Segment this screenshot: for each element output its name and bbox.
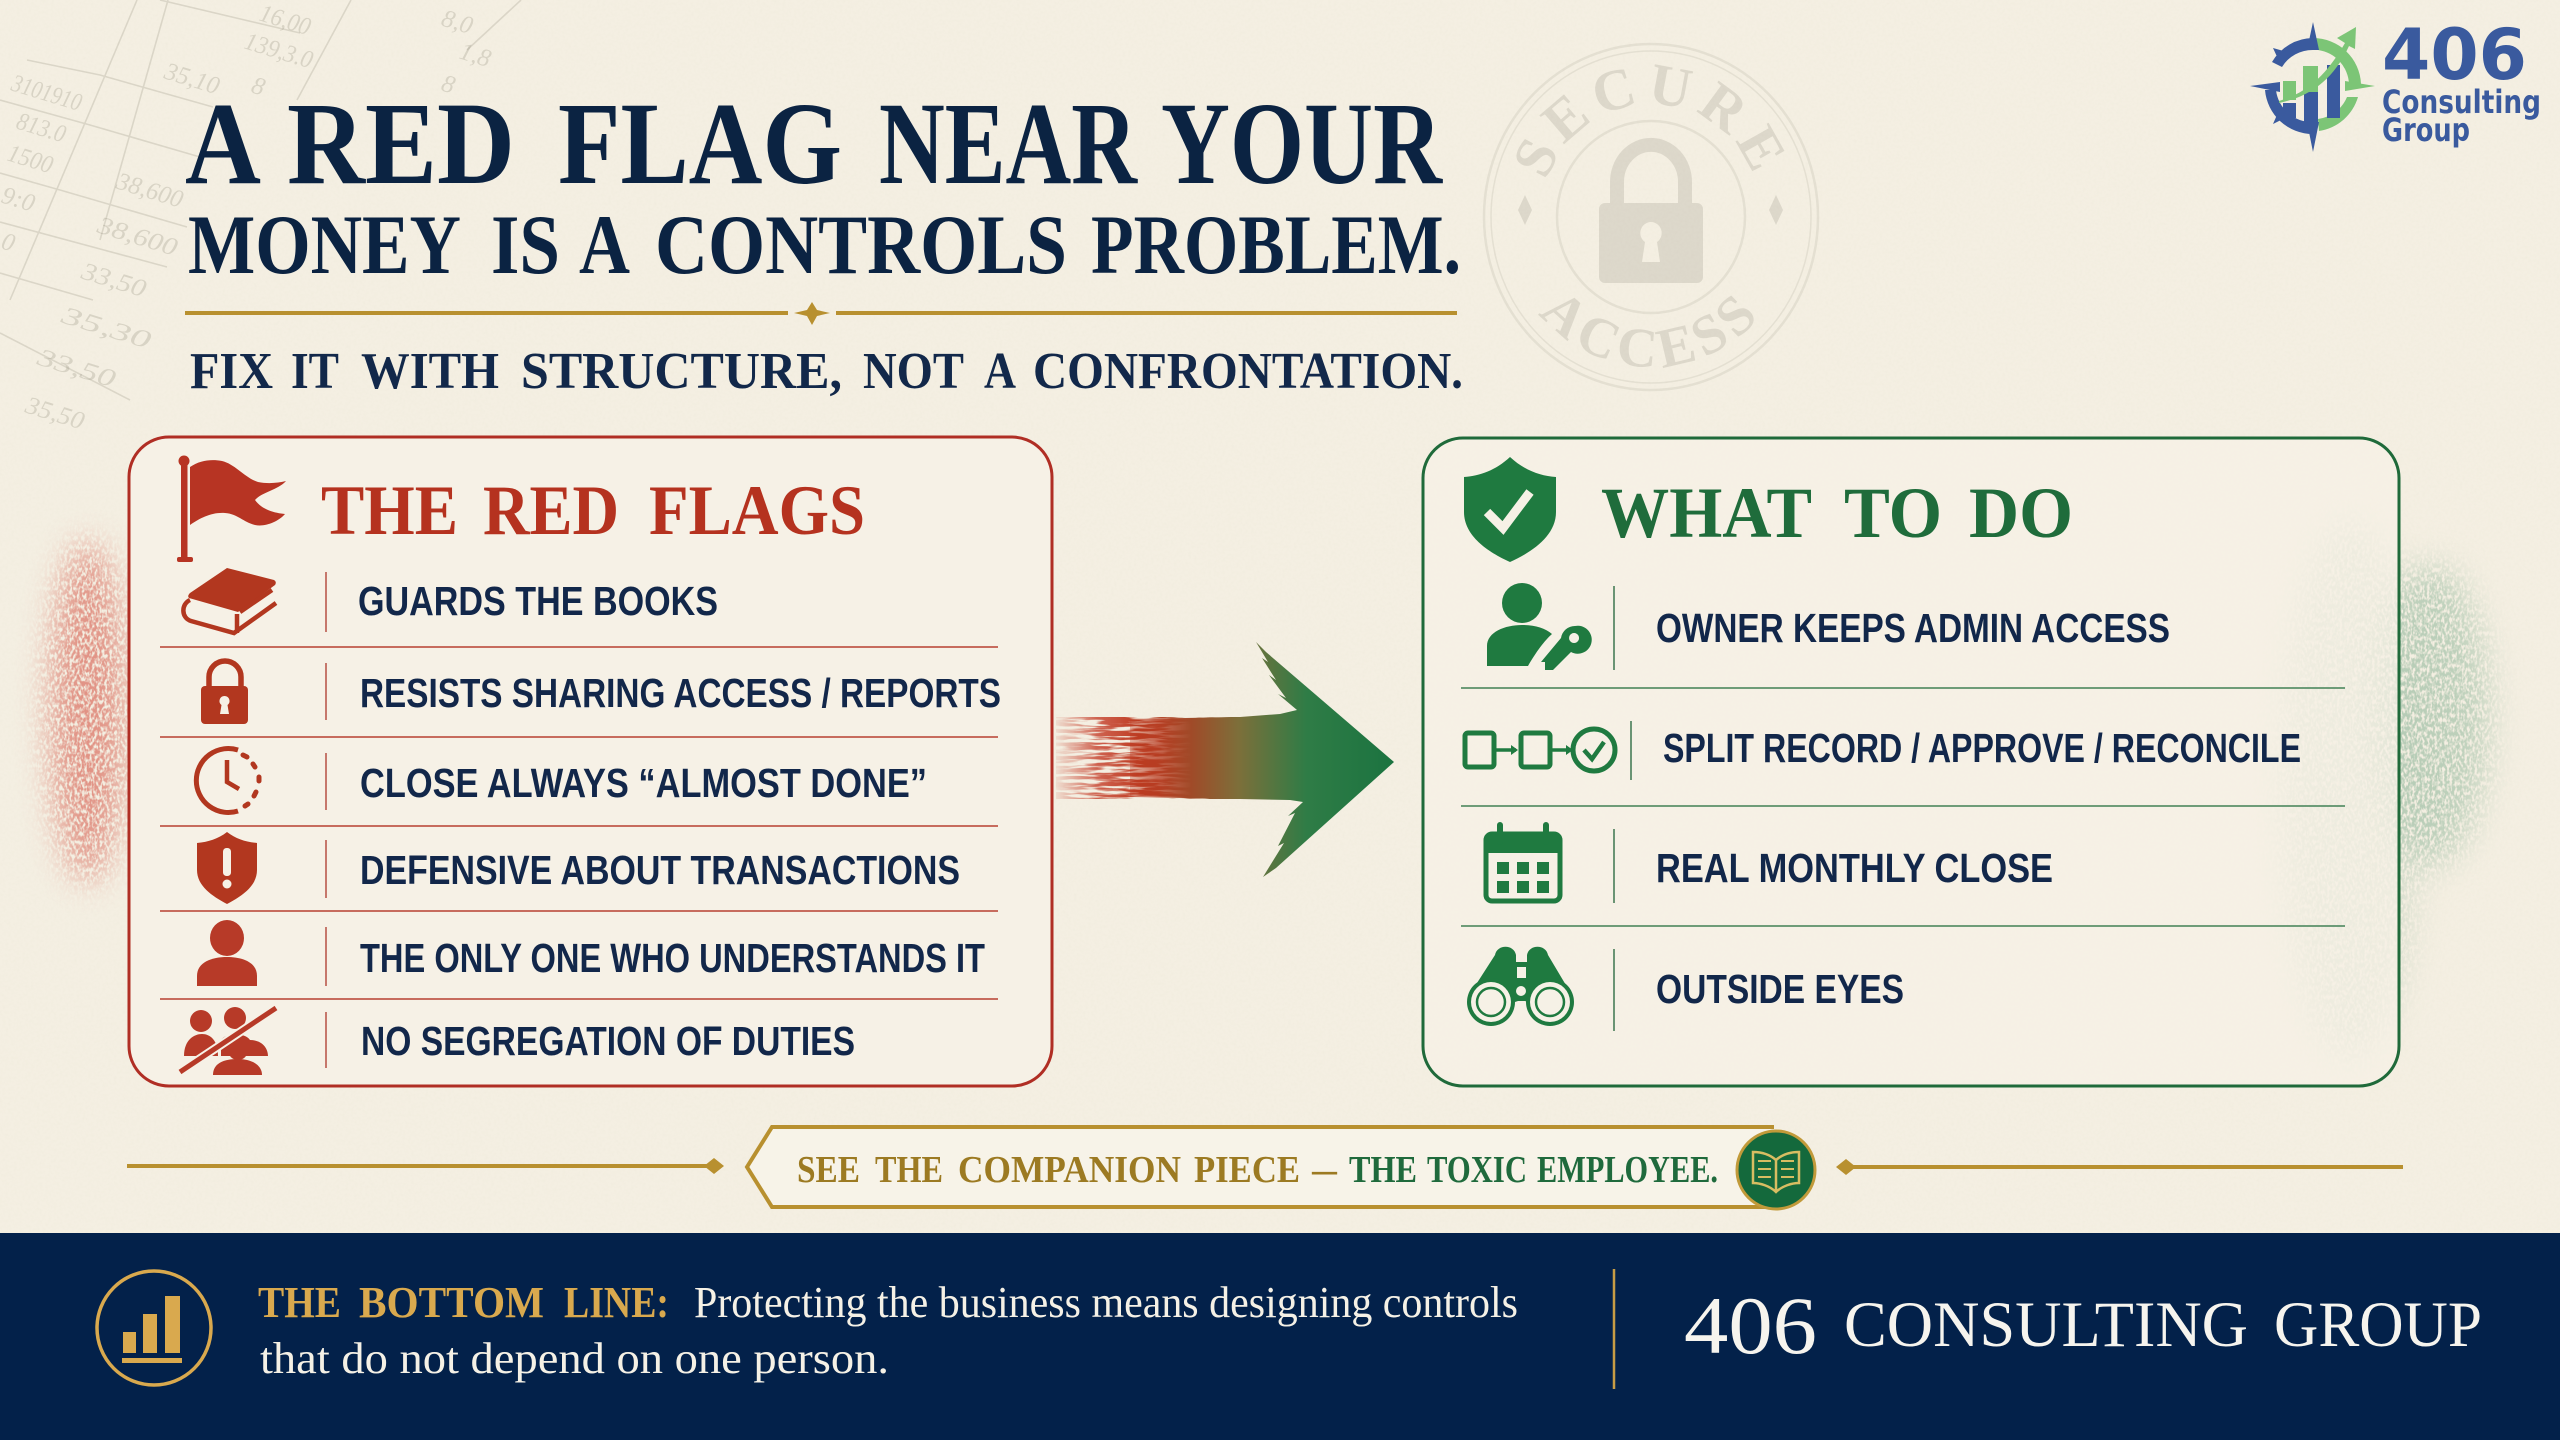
ledger handwritten numbers: 38,600 <box>93 212 181 262</box>
ledger handwritten numbers: 16,00 <box>256 0 314 41</box>
logo: 406 Consulting Group <box>2250 14 2541 152</box>
logo: 406 Consulting Group: Group <box>2382 111 2470 149</box>
ledger handwritten numbers: 8,0 <box>438 5 477 40</box>
row: close always almost done <box>196 748 927 812</box>
icon: green open book badge <box>1737 1131 1815 1209</box>
watermark stamp: secure access: SECURE <box>1516 64 1784 177</box>
row: real monthly close <box>1486 825 2053 903</box>
bottom line text: BOTTOM <box>359 1278 544 1327</box>
title: MONEY <box>188 198 461 292</box>
row: split record approve reconcile <box>1465 721 2301 780</box>
companion text: THE <box>1349 1149 1417 1191</box>
icon: padlock <box>201 661 248 724</box>
arrow: red to green <box>1056 642 1394 877</box>
icon: person <box>197 920 257 986</box>
row: guards the books: GUARDS THE BOOKS <box>358 578 718 624</box>
companion text: — <box>1311 1149 1338 1191</box>
ledger handwritten numbers: 35,50 <box>21 392 88 435</box>
ledger handwritten numbers: 3101910 <box>7 70 85 117</box>
row: outside eyes <box>1467 947 1904 1031</box>
bottom line text: THE <box>258 1278 341 1327</box>
title divider <box>185 302 1457 325</box>
ledger handwritten numbers: 35,10 <box>160 58 223 100</box>
icon: red flag <box>177 456 286 562</box>
companion piece banner <box>127 1127 2403 1209</box>
icon: person with key <box>1487 583 1592 670</box>
ledger handwritten numbers: 33,50 <box>77 258 150 303</box>
subtitle: FIX <box>190 343 273 400</box>
heading: the red flags: RED <box>483 472 619 550</box>
ledger handwritten numbers: 38,600 <box>112 168 187 214</box>
title: RED <box>287 78 515 209</box>
title: CONTROLS <box>655 198 1067 292</box>
icon: shield with check <box>1464 457 1556 562</box>
red wash behind left panel <box>50 542 126 882</box>
row: resists sharing access: RESISTS SHARING ACCESS / REPORTS <box>360 670 1001 716</box>
ledger handwritten numbers: 8 <box>248 72 269 102</box>
row: defensive about transactions: DEFENSIVE ABOUT TRANSACTIONS <box>360 847 960 893</box>
heading: the red flags: THE <box>321 472 458 550</box>
ledger handwritten numbers: 35,30 <box>57 301 155 355</box>
subtitle: CONFRONTATION. <box>1033 343 1463 400</box>
title: IS <box>491 198 560 292</box>
ledger handwritten numbers: 1,8 <box>456 38 495 73</box>
row: no segregation of duties: NO SEGREGATION OF DUTIES <box>361 1018 855 1064</box>
row: close always almost done: CLOSE ALWAYS “ALMOST DONE” <box>360 760 927 806</box>
icon: clock <box>196 748 259 812</box>
icon: gold bar chart badge <box>97 1271 211 1385</box>
title: FLAG <box>558 78 842 209</box>
row: owner keeps admin access: OWNER KEEPS ADMIN ACCESS <box>1656 605 2170 651</box>
companion text: THE <box>875 1149 943 1191</box>
panel: the red flags <box>129 437 1052 1086</box>
row: real monthly close: REAL MONTHLY CLOSE <box>1656 845 2053 891</box>
title: NEAR <box>879 78 1138 209</box>
company name <box>1684 1280 2482 1371</box>
company name: GROUP <box>2274 1289 2482 1361</box>
ledger handwritten numbers: 33,50 <box>33 344 119 393</box>
logo compass mark <box>2250 22 2375 152</box>
bottom line text: LINE: <box>564 1278 669 1327</box>
row: no segregation of duties <box>180 1007 855 1075</box>
row: resists sharing access <box>201 661 1001 724</box>
companion text <box>797 1149 1718 1191</box>
ledger handwritten numbers: 139,3.0 <box>241 28 317 74</box>
company name: CONSULTING <box>1844 1289 2248 1361</box>
footer band <box>0 1233 2560 1440</box>
title: A <box>185 78 261 209</box>
icon: workflow steps <box>1465 729 1615 771</box>
panel: what to do <box>1423 438 2399 1086</box>
heading: what to do: WHAT <box>1601 473 1812 553</box>
icon: crossed-out people <box>180 1007 276 1075</box>
title: YOUR <box>1161 78 1443 209</box>
icon: calendar <box>1486 825 1560 901</box>
ledger handwritten numbers: 813.0 <box>13 108 69 148</box>
row: outside eyes: OUTSIDE EYES <box>1656 966 1904 1012</box>
row: the only one who understands it <box>197 920 985 986</box>
title <box>185 78 1461 292</box>
icon: binoculars <box>1467 947 1574 1026</box>
heading: the red flags <box>321 472 865 550</box>
subtitle: A <box>984 343 1016 400</box>
heading: what to do: TO <box>1844 473 1942 553</box>
company name: 406 <box>1684 1280 1817 1371</box>
row: split record approve reconcile: SPLIT RECORD / APPROVE / RECONCILE <box>1663 725 2301 771</box>
heading: what to do: DO <box>1969 473 2073 553</box>
ledger background texture <box>0 0 521 400</box>
title: PROBLEM. <box>1091 198 1461 292</box>
companion text: TOXIC <box>1427 1149 1527 1191</box>
logo: 406 Consulting Group: 406 <box>2382 14 2527 96</box>
icon: shield with exclamation <box>197 832 257 904</box>
subtitle: STRUCTURE, <box>521 343 842 400</box>
row: guards the books <box>183 568 718 633</box>
row: defensive about transactions <box>197 832 960 904</box>
companion text: SEE <box>797 1149 860 1191</box>
companion text: COMPANION <box>958 1149 1181 1191</box>
heading: what to do <box>1601 473 2073 553</box>
subtitle: NOT <box>863 343 964 400</box>
companion text: PIECE <box>1194 1149 1300 1191</box>
bottom line text: that do not depend on one person. <box>260 1334 889 1383</box>
companion text: EMPLOYEE. <box>1537 1149 1718 1191</box>
ledger handwritten numbers: 1500 <box>4 140 57 179</box>
subtitle: IT <box>291 343 339 400</box>
bottom line text: Protecting the business means designing controls <box>694 1278 1518 1327</box>
ledger handwritten numbers <box>0 0 495 435</box>
watermark stamp: secure access: ACCESS <box>1538 296 1754 368</box>
ledger handwritten numbers: 8 <box>438 70 459 100</box>
bottom line text <box>258 1278 1518 1383</box>
row: owner keeps admin access <box>1487 583 2170 670</box>
icon: book <box>183 568 276 633</box>
watermark stamp: secure access <box>1483 43 1819 391</box>
row: the only one who understands it: THE ONLY ONE WHO UNDERSTANDS IT <box>360 935 985 981</box>
subtitle <box>190 343 1463 400</box>
green wash behind right panel <box>2280 520 2488 1060</box>
subtitle: WITH <box>361 343 499 400</box>
heading: the red flags: FLAGS <box>649 472 865 550</box>
title: A <box>579 198 630 292</box>
